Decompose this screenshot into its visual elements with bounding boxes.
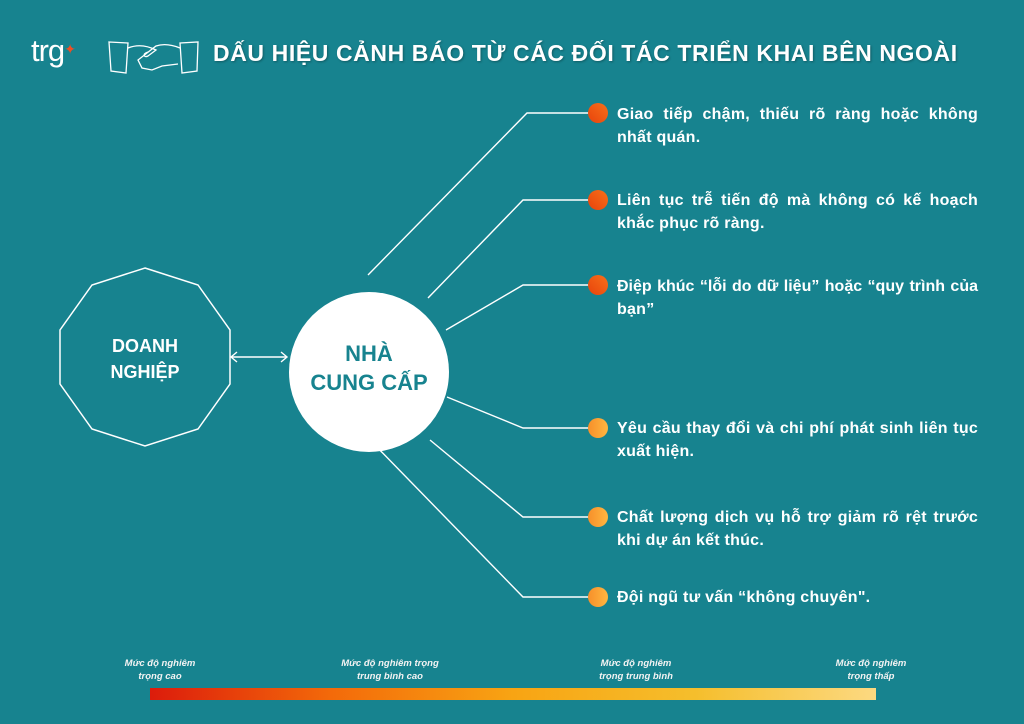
text: trọng thấp <box>848 671 894 682</box>
icon: handshake <box>108 41 199 74</box>
legend labels: trọng cao <box>138 671 182 682</box>
text 4: xuất hiện. <box>617 443 694 460</box>
shape: doanh nghiep decagon <box>60 268 230 446</box>
circle: nha cung cap <box>289 292 449 452</box>
text 5 <box>617 508 978 549</box>
title: DẤU HIỆU CẢNH BÁO TỪ CÁC ĐỐI TÁC TRIỂN KHAI BÊN NGOÀI <box>213 40 958 66</box>
text 2: Liên tục trễ tiến độ mà không có kế hoạch <box>617 192 978 209</box>
bullets <box>588 103 608 607</box>
text: trọng trung bình <box>599 671 673 682</box>
circle: nha cung cap: NHÀ <box>345 341 393 366</box>
text 5: Chất lượng dịch vụ hỗ trợ giảm rõ rệt trước <box>617 509 978 526</box>
connectors <box>231 113 597 597</box>
text 1: Giao tiếp chậm, thiếu rõ ràng hoặc không <box>617 106 978 123</box>
severity bar <box>150 688 876 700</box>
text: Mức độ nghiêm <box>601 658 671 669</box>
text 3: Điệp khúc “lỗi do dữ liệu” hoặc “quy trình của <box>617 278 978 295</box>
text 2: khắc phục rõ ràng. <box>617 215 765 232</box>
text: Mức độ nghiêm trọng <box>341 658 439 669</box>
text: trung bình cao <box>357 671 423 682</box>
shape: doanh nghiep decagon: NGHIỆP <box>110 361 180 382</box>
text 3: bạn” <box>617 301 654 318</box>
text 1: nhất quán. <box>617 129 700 146</box>
text 4 <box>617 420 978 460</box>
text 4: Yêu cầu thay đổi và chi phí phát sinh liên tục <box>617 420 978 437</box>
legend labels: Mức độ nghiêm <box>125 658 195 669</box>
text: Mức độ nghiêm <box>836 658 906 669</box>
text 3 <box>617 277 978 318</box>
text 5: khi dự án kết thúc. <box>617 532 764 549</box>
shape: doanh nghiep decagon: DOANH <box>112 336 178 356</box>
logo: trg✦ <box>31 33 75 68</box>
text 2 <box>617 191 978 232</box>
text 6: Đội ngũ tư vấn “không chuyên". <box>617 589 870 606</box>
circle: nha cung cap: CUNG CẤP <box>310 370 428 395</box>
legend labels <box>124 658 195 682</box>
text 1 <box>617 106 978 146</box>
